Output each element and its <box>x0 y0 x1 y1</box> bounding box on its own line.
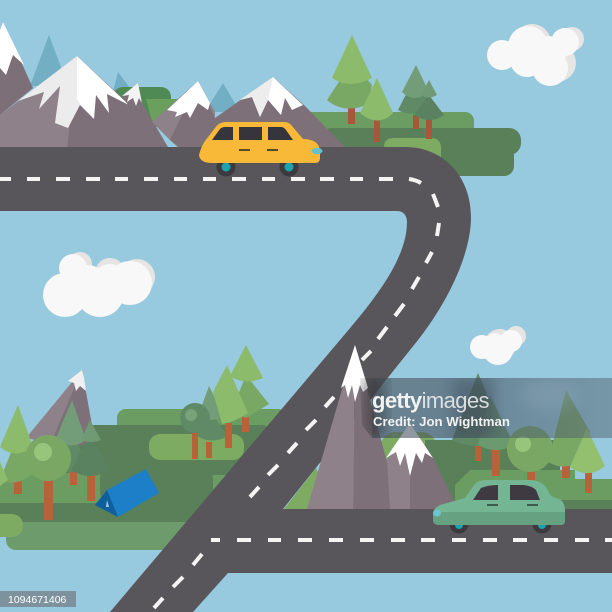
headlight <box>433 510 441 516</box>
car body <box>433 480 565 525</box>
tree: tall pine <box>327 35 372 124</box>
mountain: small foreground <box>386 423 458 509</box>
tent <box>95 469 159 517</box>
hill behind top mountains <box>113 87 178 127</box>
door handles <box>487 504 538 506</box>
ground: lower right <box>284 432 612 509</box>
tree: round dark <box>180 403 210 459</box>
tree: mid pine <box>56 400 88 485</box>
tree: right mid pine <box>478 395 514 476</box>
cloud: middle left <box>43 252 155 317</box>
image id label: 1094671406 <box>8 594 67 606</box>
tree: round <box>25 435 71 520</box>
cloud: top right <box>487 24 584 86</box>
green sedan car <box>433 480 565 534</box>
tree: mid pine dark <box>197 386 228 458</box>
car body <box>199 122 320 163</box>
windows <box>212 127 293 140</box>
mountain: big <box>0 56 168 147</box>
tree: right round <box>507 426 553 482</box>
ground: top right island <box>300 112 521 176</box>
mountain: lower left <box>26 370 95 445</box>
road centre dashes <box>0 179 612 608</box>
road <box>0 147 612 612</box>
tree: tilted front pine <box>213 365 248 448</box>
tree: tilted back pine <box>230 345 269 432</box>
windows <box>473 485 540 500</box>
tree: dark pine front <box>414 80 444 139</box>
mountain: right of car <box>200 77 345 147</box>
watermark logo text: gettyimages <box>372 388 489 413</box>
tree: right small pine <box>570 428 605 493</box>
tree: right back pine <box>548 390 590 478</box>
mountain: centre <box>152 81 228 147</box>
mountain: far left <box>0 22 33 115</box>
car lower panel <box>433 512 565 525</box>
mountain: small snow peak <box>122 83 168 147</box>
tree: dark pine back <box>398 65 429 129</box>
image id label <box>0 591 76 607</box>
door handles <box>239 149 278 151</box>
yellow station wagon car <box>199 122 322 176</box>
tree: lower left edge pine <box>0 405 36 494</box>
tree: dark pine <box>71 420 110 501</box>
watermark credit text: Credit: Jon Wightman <box>373 414 510 429</box>
cloud: small centre right <box>470 326 526 365</box>
wheels <box>450 514 552 534</box>
distant blue peaks <box>30 35 240 112</box>
watermark band <box>363 378 612 438</box>
ground: lower left island <box>0 409 287 550</box>
tree: small pine <box>360 78 393 142</box>
wheels <box>216 158 298 176</box>
tree: right dark pine <box>452 373 505 461</box>
headlight <box>312 148 322 154</box>
mountain: tall foreground <box>307 345 400 509</box>
tree: edge sapling <box>0 462 8 486</box>
